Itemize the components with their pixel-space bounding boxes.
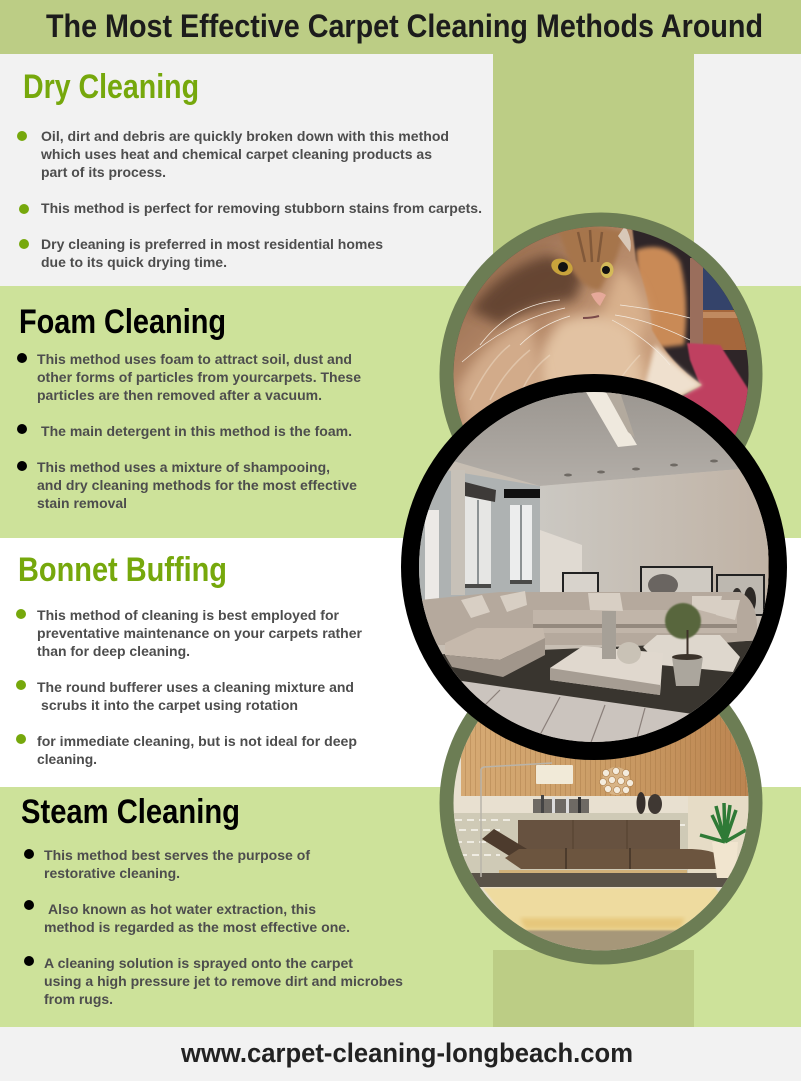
title banner: [0, 0, 801, 54]
bullet list: foam cleaning: This method uses a mixture of shampooing,: [37, 459, 330, 475]
rug: [483, 888, 726, 930]
cat eyes: [551, 258, 614, 278]
potted plant: [700, 803, 746, 878]
bullet list: bonnet buffing: for immediate cleaning, but is not ideal for deep: [37, 733, 357, 749]
bullet list: bonnet buffing: cleaning.: [37, 751, 97, 767]
bullet list: bonnet buffing: than for deep cleaning.: [37, 643, 190, 659]
bullet list: steam cleaning: using a high pressure jet to remove dirt and microbes: [44, 973, 403, 989]
heading: bonnet buffing: Bonnet Buffing: [18, 551, 227, 589]
bullet list: steam cleaning: This method best serves the purpose of: [44, 847, 310, 863]
bullet list: foam cleaning: stain removal: [37, 495, 127, 511]
bullet list: dry cleaning: [17, 128, 482, 270]
heading: foam cleaning: Foam Cleaning: [19, 303, 226, 341]
bullet list: bonnet buffing: [16, 607, 363, 767]
panel: dry cleaning: [17, 68, 482, 270]
photo circle: cat on red blanket: [440, 212, 762, 447]
bullet list: bonnet buffing: The round bufferer uses a cleaning mixture and: [37, 679, 354, 695]
panel: steam cleaning: [21, 793, 403, 1007]
potted tree: [665, 603, 703, 686]
website footer: www.carpet-cleaning-longbeach.com: [180, 1038, 633, 1068]
bullet list: dry cleaning: Dry cleaning is preferred in most residential homes: [41, 236, 383, 252]
bullet list: bonnet buffing: preventative maintenance on your carpets rather: [37, 625, 363, 641]
bullet list: bonnet buffing: This method of cleaning is best employed for: [37, 607, 340, 623]
bullet list: dry cleaning: which uses heat and chemical carpet cleaning products as: [40, 146, 432, 162]
bullet list: steam cleaning: [24, 847, 403, 1007]
bullet list: steam cleaning: from rugs.: [44, 991, 113, 1007]
bullet list: foam cleaning: other forms of particles from yourcarpets. These: [37, 369, 361, 385]
coffee tables and vase: [550, 611, 740, 695]
ceiling spots: [564, 460, 718, 476]
cat nose and whiskers: [462, 292, 690, 365]
bullet list: steam cleaning: A cleaning solution is sprayed onto the carpet: [44, 955, 353, 971]
bullet list: foam cleaning: [17, 351, 361, 511]
skylight: [586, 392, 637, 447]
bullet list: foam cleaning: This method uses foam to attract soil, dust and: [37, 351, 352, 367]
bullet list: steam cleaning: Also known as hot water extraction, this: [48, 901, 316, 917]
bullet list: foam cleaning: particles are then removed after a vacuum.: [37, 387, 322, 403]
photo circle: modern living room with sofa and rug: [440, 704, 762, 964]
heading: dry cleaning: Dry Cleaning: [23, 68, 199, 106]
bullet list: foam cleaning: and dry cleaning methods for the most effective: [37, 477, 357, 493]
bullet list: bonnet buffing: scrubs it into the carpet using rotation: [41, 697, 298, 713]
panel: foam cleaning: [17, 303, 361, 511]
wall pictures: [563, 567, 764, 615]
sectional sofa: [420, 591, 757, 677]
bullet list: dry cleaning: part of its process.: [41, 164, 166, 180]
windows: [415, 465, 540, 625]
floor lamp: [481, 763, 573, 877]
bullet list: dry cleaning: Oil, dirt and debris are quickly broken down with this method: [41, 128, 449, 144]
bullet list: dry cleaning: due to its quick drying time.: [41, 254, 227, 270]
sofa: [482, 820, 718, 873]
floor and rug: [452, 670, 736, 742]
panel: bonnet buffing: [16, 551, 363, 767]
bullet list: steam cleaning: method is regarded as the most effective one.: [44, 919, 350, 935]
photo circle: white loft lounge with black frame: [401, 374, 787, 760]
bullet list: dry cleaning: This method is perfect for removing stubborn stains from carpets.: [41, 200, 482, 216]
pendant globe: [600, 767, 634, 795]
bullet list: foam cleaning: The main detergent in this method is the foam.: [41, 423, 352, 439]
books and vases: [533, 792, 662, 814]
bullet list: steam cleaning: restorative cleaning.: [44, 865, 180, 881]
heading: steam cleaning: Steam Cleaning: [21, 793, 240, 831]
